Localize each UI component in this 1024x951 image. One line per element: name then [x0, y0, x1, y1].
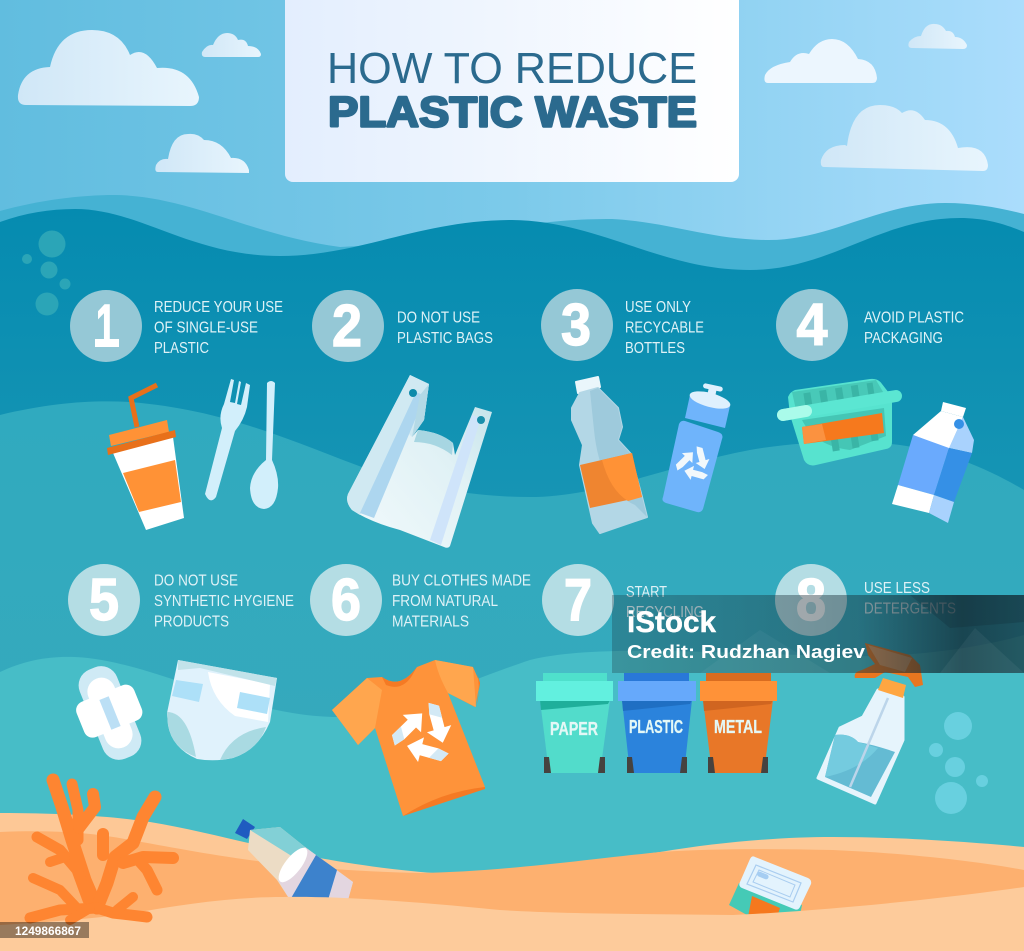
icon: plastic bag	[347, 375, 492, 548]
title panel	[285, 0, 739, 182]
step 7: START	[626, 584, 667, 601]
litter: bottle on sand	[235, 819, 353, 900]
plastic label: PLASTIC	[629, 717, 683, 737]
mid water layer	[0, 401, 1024, 780]
image id tag: 1249866867	[15, 926, 81, 938]
step 1: 1	[96, 293, 116, 359]
watermark band	[612, 595, 1024, 673]
paper label: PAPER	[550, 719, 598, 739]
step 2: 2	[332, 293, 362, 359]
icon: plastic bin	[618, 673, 696, 773]
icon: sanitary pad	[63, 657, 157, 769]
cloud: large left	[18, 30, 199, 106]
icon: milk carton	[892, 402, 974, 523]
step 8: 8	[796, 567, 826, 633]
step 4: 4	[796, 292, 828, 358]
icon: plastic spoon	[250, 381, 278, 509]
icon: takeaway cup	[107, 385, 184, 530]
metal label: METAL	[714, 717, 762, 737]
step 2	[312, 290, 493, 362]
back wave	[0, 195, 1024, 300]
step 1: REDUCE YOUR USE	[154, 299, 283, 316]
step 6	[310, 564, 531, 636]
recycle symbol on shirt	[377, 694, 460, 777]
image id tag	[0, 922, 89, 938]
step 1	[70, 290, 283, 362]
sky background	[0, 0, 1024, 300]
ocean surface	[0, 209, 1024, 560]
step 5: 5	[89, 567, 119, 633]
icon: plastic fork	[205, 379, 250, 500]
step 7: 7	[564, 567, 592, 633]
icon: diaper	[167, 660, 277, 760]
icon: spray bottle	[818, 643, 923, 803]
step 5: PRODUCTS	[154, 614, 229, 630]
icon: reusable sports bottle	[662, 383, 732, 512]
step 5: SYNTHETIC HYGIENE	[154, 593, 294, 610]
title line 1: HOW TO REDUCE	[327, 44, 697, 93]
bubbles: upper left	[22, 230, 70, 316]
cloud: middle	[155, 134, 249, 173]
step 3: BOTTLES	[625, 340, 685, 357]
step 6: 6	[331, 567, 361, 633]
coral	[30, 780, 173, 920]
step 4: AVOID PLASTIC	[864, 310, 964, 326]
cloud: small top	[202, 33, 261, 57]
step 6: FROM NATURAL	[392, 593, 498, 610]
icon: t-shirt	[332, 660, 485, 816]
watermark brand: iStock	[627, 606, 716, 639]
title line 2: PLASTIC WASTE	[328, 88, 697, 136]
step 2: PLASTIC BAGS	[397, 330, 493, 347]
bottle label highlight	[274, 844, 312, 886]
middle sand	[0, 831, 1024, 951]
icon: food container	[783, 379, 896, 465]
cloud: right top	[764, 39, 877, 83]
step 1: PLASTIC	[154, 340, 209, 357]
step 5: DO NOT USE	[154, 572, 238, 590]
step 2: DO NOT USE	[397, 310, 480, 326]
cloud: right small	[908, 24, 967, 49]
icon: paper bin	[536, 673, 613, 773]
step 6: BUY CLOTHES MADE	[392, 572, 531, 590]
recycle symbol	[667, 441, 714, 488]
step 8	[775, 564, 956, 636]
front sand	[0, 887, 1024, 951]
icon: plastic water bottle	[572, 377, 647, 533]
step 4: PACKAGING	[864, 330, 943, 347]
step 1: OF SINGLE-USE	[154, 320, 258, 336]
step 3: USE ONLY	[625, 299, 691, 316]
step 7: RECYCLING	[626, 604, 704, 621]
step 3: RECYCABLE	[625, 320, 704, 336]
back sand	[0, 813, 1024, 951]
cloud: right large	[821, 105, 988, 171]
step 8: DETERGENTS	[864, 600, 956, 618]
step 7	[542, 564, 704, 636]
step 3: 3	[561, 292, 591, 358]
litter: food container on sand	[729, 856, 811, 917]
step 4	[776, 289, 964, 361]
step 5	[68, 564, 294, 636]
step 3	[541, 289, 704, 361]
bubbles: lower right	[929, 712, 988, 814]
watermark credit: Credit: Rudzhan Nagiev	[627, 642, 865, 662]
step 8: USE LESS	[864, 580, 930, 597]
icon: metal bin	[700, 673, 777, 773]
lower water layer	[0, 635, 1024, 880]
step 6: MATERIALS	[392, 614, 469, 630]
